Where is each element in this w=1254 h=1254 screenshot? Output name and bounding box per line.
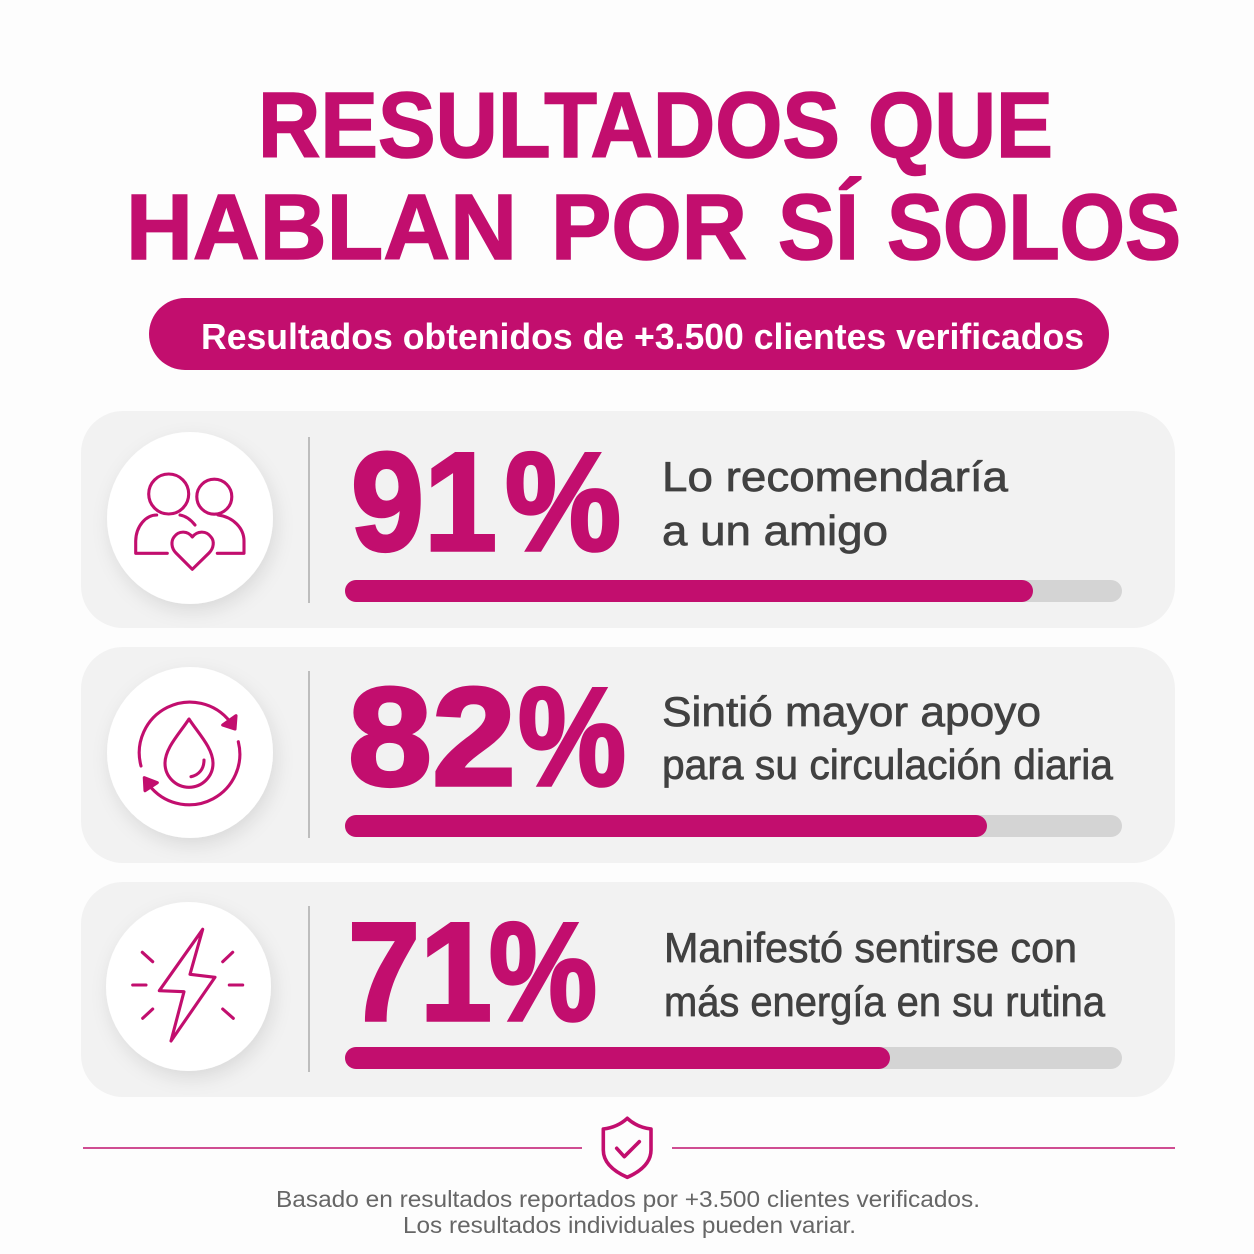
title: SOLOS [887, 175, 1181, 279]
panel: 91% recommend [81, 411, 1175, 628]
description: a un amigo [662, 507, 888, 554]
title: QUE [868, 73, 1053, 177]
value: 91%: % [505, 423, 621, 580]
title [126, 73, 1181, 279]
panel: 71% energy [81, 882, 1175, 1097]
description: Sintió mayor apoyo [662, 688, 1041, 735]
subtitle pill: Resultados obtenidos de +3.500 clientes verificados [201, 316, 1084, 357]
title: RESULTADOS [258, 73, 840, 177]
description [664, 924, 1106, 1025]
value: 82%: 82 [348, 658, 516, 815]
panel: 82% circulation [81, 647, 1175, 863]
value: 71% [348, 893, 597, 1050]
value: 71%: 71 [348, 893, 492, 1050]
value: 82% [348, 658, 626, 815]
description: para su circulación diaria [662, 741, 1114, 788]
subtitle pill [149, 298, 1109, 370]
title: POR [551, 175, 747, 279]
description: Manifestó sentirse con [664, 924, 1077, 971]
description: Lo recomendaría [662, 453, 1009, 500]
icon: shield with check [603, 1118, 651, 1177]
footnote: Basado en resultados reportados por +3.500 clientes verificados. [276, 1186, 980, 1212]
icon: people with heart [107, 432, 273, 604]
description: más energía en su rutina [664, 978, 1106, 1025]
footnote [276, 1186, 980, 1238]
value: 91%: 91 [351, 423, 497, 580]
title: HABLAN [126, 175, 517, 279]
progress bar: 91% [345, 580, 1122, 602]
icon: lightning bolt [106, 902, 271, 1071]
title: SÍ [778, 175, 861, 279]
progress bar: 82% [345, 815, 1122, 837]
progress bar: 71% [345, 1047, 1122, 1069]
footnote: Los resultados individuales pueden variar. [403, 1212, 856, 1238]
value: 71%: % [489, 893, 597, 1050]
value: 91% [351, 423, 621, 580]
value: 82%: % [518, 658, 626, 815]
description [662, 453, 1009, 554]
description [662, 688, 1114, 788]
icon: water drop with circular arrows [107, 667, 273, 838]
